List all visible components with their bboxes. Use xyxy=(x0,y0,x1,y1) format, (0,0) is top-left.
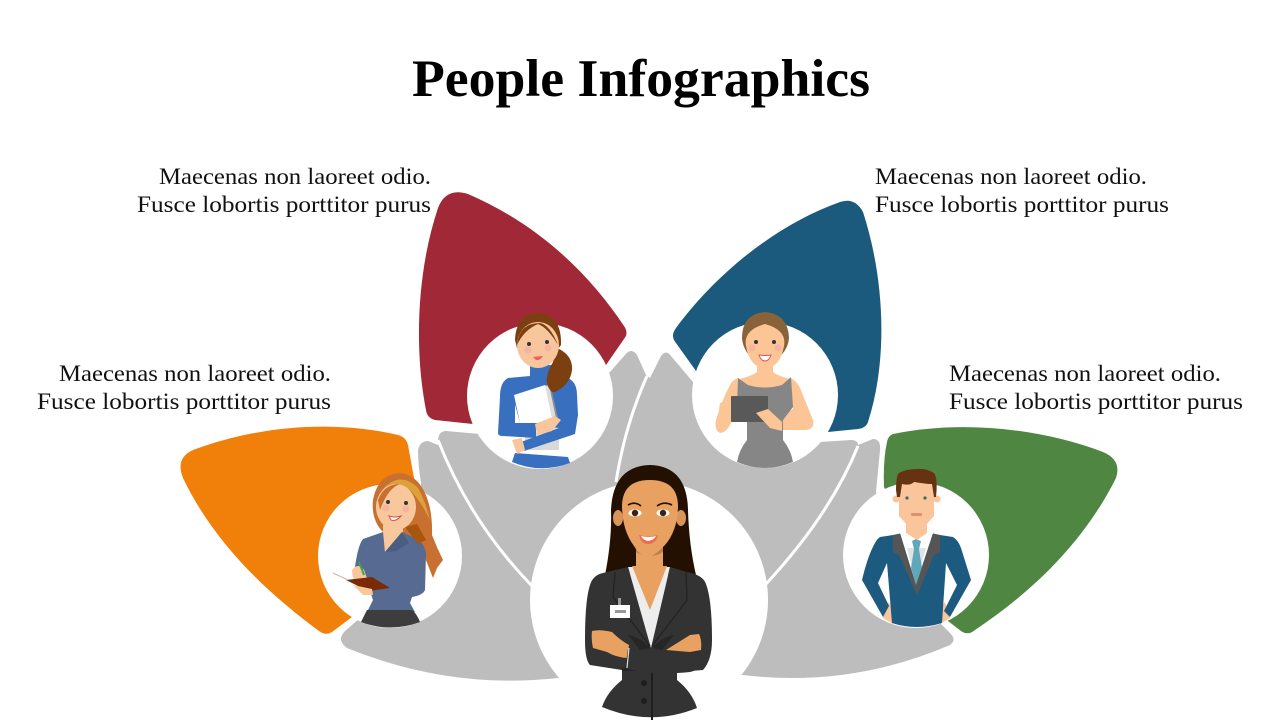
figure: man in blue suit xyxy=(862,469,971,627)
text block: upper right: Maecenas non laoreet odio. xyxy=(875,164,1147,189)
text block: upper left: Fusce lobortis porttitor purus xyxy=(137,192,431,217)
text block: upper right: Fusce lobortis porttitor purus xyxy=(875,192,1169,217)
figure: centre woman in dark suit xyxy=(585,465,712,720)
text block: upper left: Maecenas non laoreet odio. xyxy=(159,164,431,189)
text block: lower right: Fusce lobortis porttitor purus xyxy=(949,389,1243,414)
text block: upper right xyxy=(875,164,1169,217)
petal: blue xyxy=(673,201,881,432)
petal: orange xyxy=(181,427,414,634)
figure: woman with tablet xyxy=(716,312,813,468)
text block: lower left: Maecenas non laoreet odio. xyxy=(59,361,331,386)
figure: woman with folder xyxy=(498,313,578,468)
title: People Infographics xyxy=(412,50,870,108)
text block: lower left: Fusce lobortis porttitor purus xyxy=(37,389,331,414)
text block: lower right xyxy=(949,361,1243,414)
white circles xyxy=(318,322,989,719)
text block: lower right: Maecenas non laoreet odio. xyxy=(949,361,1221,386)
text block: lower left xyxy=(37,361,331,414)
petal: green xyxy=(884,427,1117,633)
figure: woman with notebook xyxy=(333,473,443,628)
text block: upper left xyxy=(137,164,431,217)
petal: crimson xyxy=(419,192,626,424)
grey inner flower xyxy=(341,351,954,681)
